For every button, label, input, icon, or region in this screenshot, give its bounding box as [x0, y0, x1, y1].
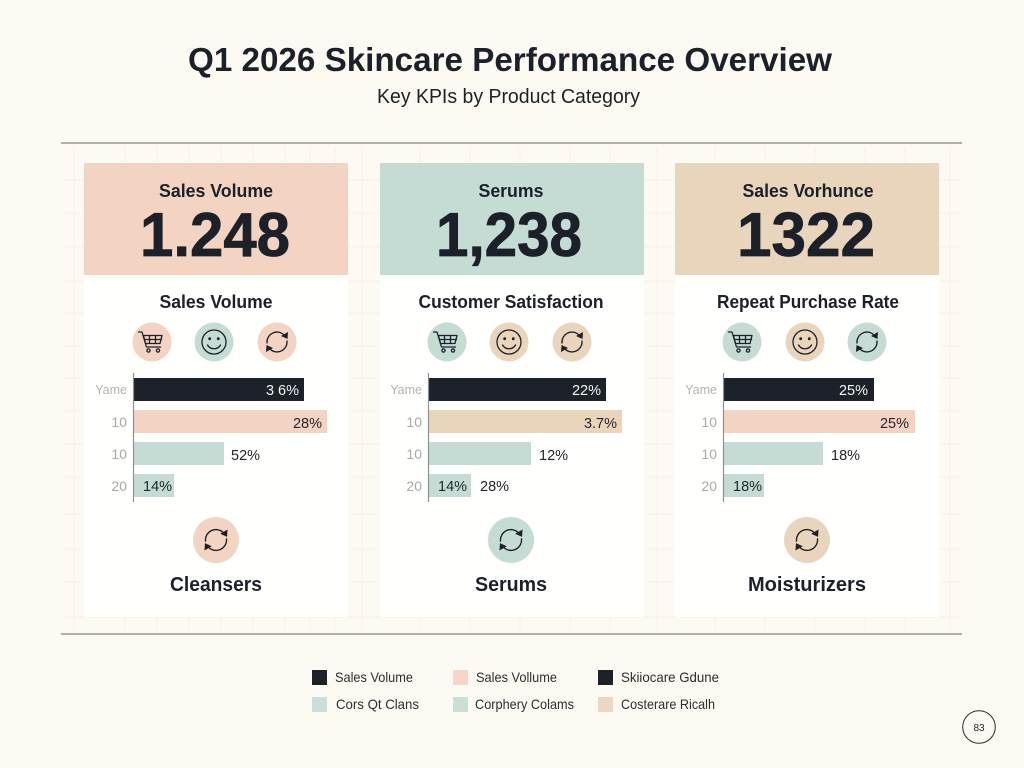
panel: cleansers: [84, 163, 348, 617]
bar chart: 18%: [831, 448, 860, 464]
bar chart: 10: [406, 414, 422, 430]
icon: category repeat: [193, 517, 239, 563]
page number badge: 83: [973, 723, 985, 734]
icon: category repeat: [488, 517, 534, 563]
subtitle: Key KPIs by Product Category: [377, 86, 640, 108]
KPI header: sales: Sales Vorhunce: [742, 181, 874, 201]
bar chart: 10: [111, 414, 127, 430]
bar chart: 28%: [293, 416, 322, 432]
KPI header: sales volume: [84, 163, 348, 275]
legend: [312, 669, 719, 712]
metric heading: Repeat Purchase Rate: [717, 292, 899, 312]
category label: Cleansers: [170, 574, 262, 596]
icon: repeat: [848, 322, 886, 362]
bar chart: 3.7%: [584, 416, 617, 432]
bar chart: 18%: [733, 479, 762, 495]
bar chart: Yame: [95, 383, 127, 397]
bar chart: [390, 373, 622, 502]
panel: moisturizers: [675, 163, 939, 617]
bar chart: 14%: [143, 479, 172, 495]
bar chart: 20: [406, 478, 422, 494]
KPI header: sales volume: 1.248: [140, 201, 290, 270]
KPI header: serums: [380, 163, 644, 275]
icon: cart: [428, 322, 466, 362]
KPI header: serums: Serums: [478, 181, 544, 201]
icon: smile: [786, 322, 824, 362]
icon: smile: [490, 322, 528, 362]
bar chart: 28%: [480, 479, 509, 495]
KPI header: sales: [675, 163, 939, 275]
category label: Serums: [475, 574, 547, 596]
category label: Moisturizers: [748, 574, 866, 596]
legend item: teal two: Corphery Colams: [475, 696, 574, 712]
bar chart: 22%: [572, 383, 601, 399]
icon: repeat: [258, 322, 296, 362]
bar chart: 25%: [880, 416, 909, 432]
metric heading: Sales Volume: [160, 292, 272, 312]
legend item: skincare guide: Skiiocare Gdune: [621, 669, 719, 685]
KPI header: serums: 1,238: [436, 201, 582, 270]
bar chart: 10: [111, 446, 127, 462]
bar chart: 52%: [231, 448, 260, 464]
KPI header: sales volume: Sales Volume: [159, 181, 273, 201]
bar chart: [95, 373, 327, 502]
bar chart: 12%: [539, 448, 568, 464]
icon: cart: [722, 322, 762, 362]
legend item: sales volume peach: Sales Vollume: [476, 669, 557, 685]
metric heading: Customer Satisfaction: [418, 292, 604, 312]
bar chart: 20: [111, 478, 127, 494]
KPI header: sales: 1322: [737, 201, 875, 270]
legend item: teal one: Cors Qt Clans: [336, 696, 419, 712]
bar chart: 10: [701, 446, 717, 462]
bar chart: Yame: [390, 383, 422, 397]
title: Q1 2026 Skincare Performance Overview: [188, 41, 832, 78]
bar chart: [685, 373, 915, 502]
icon: smile: [194, 322, 234, 362]
legend item: sales volume dark: Sales Volume: [335, 669, 413, 685]
bar chart: 3 6%: [266, 383, 299, 399]
bar chart: 14%: [438, 479, 467, 495]
bar chart: Yame: [685, 383, 717, 397]
icon: repeat: [552, 322, 592, 362]
bar chart: 10: [406, 446, 422, 462]
bar chart: 25%: [839, 383, 868, 399]
panel: serums: [380, 163, 644, 617]
bar chart: 10: [701, 414, 717, 430]
page number badge: [963, 711, 995, 743]
legend item: tan: Costerare Ricalh: [621, 696, 715, 712]
icon: category repeat: [784, 517, 830, 563]
bar chart: 20: [701, 478, 717, 494]
icon: cart: [132, 322, 172, 362]
